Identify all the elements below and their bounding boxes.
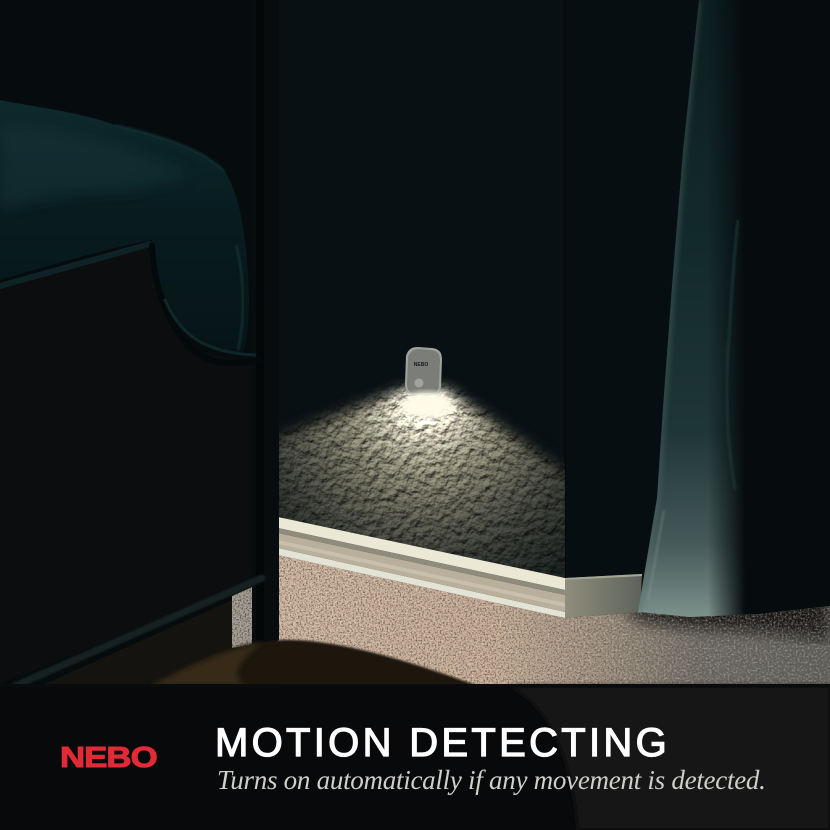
motion sensor night light [401,347,453,418]
carpet patch behind bed [232,587,252,648]
footboard panel [0,245,258,686]
carpet [278,555,830,687]
subheading: Turns on automatically if any movement is detected. [217,765,766,795]
foreground shadow object [150,640,478,686]
footboard rail [0,244,262,686]
bed post [252,0,279,640]
light pool on wall [279,378,565,578]
heading: MOTION DETECTING [215,721,670,765]
motion sensor night light: NEBO [414,362,428,368]
curtain [630,0,830,620]
logo: NEBO: NEBO [60,742,157,774]
bottom caption band [0,684,830,830]
baseboard [278,517,642,618]
blanket [0,100,249,352]
